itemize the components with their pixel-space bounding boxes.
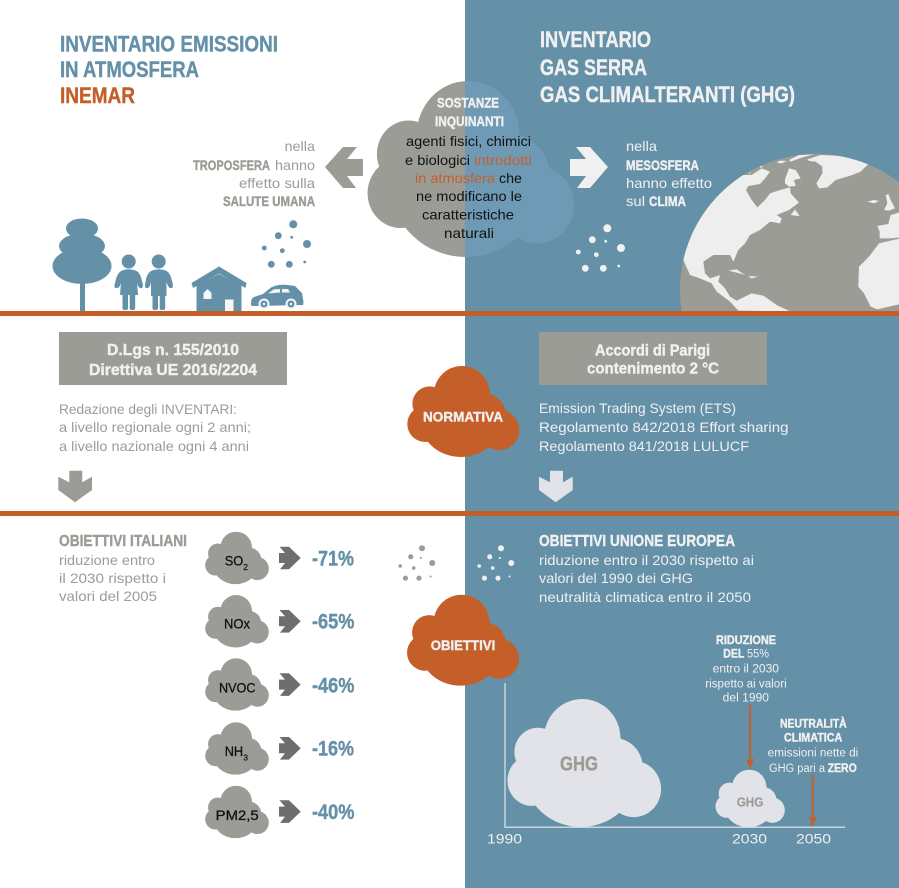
box: D.Lgs: D.Lgs n. 155/2010 bbox=[107, 342, 239, 359]
text block: obiettivi unione europea: riduzione entro il 2030 rispetto ai bbox=[539, 552, 754, 568]
cloud: sostanze inquinanti: INQUINANTI bbox=[435, 113, 504, 129]
title: inventario emissioni bbox=[60, 32, 278, 108]
cloud: sostanze inquinanti: SOSTANZE bbox=[437, 94, 499, 110]
cloud: sostanze inquinanti: in atmosfera bbox=[415, 170, 495, 186]
row: SO2: SO bbox=[225, 553, 243, 569]
icon: pollutant dots white bbox=[576, 224, 625, 272]
icon: house bbox=[192, 266, 246, 311]
icon: two people bbox=[114, 254, 173, 310]
callout: riduzione 55% bbox=[705, 635, 787, 705]
year labels: 2050 bbox=[796, 831, 831, 847]
callout: neutralita climatica: ZERO bbox=[828, 763, 857, 775]
icon: dots grey lower bbox=[398, 545, 435, 581]
text block: obiettivi italiani: valori del 2005 bbox=[59, 588, 157, 604]
callout: riduzione 55%: del 1990 bbox=[723, 693, 769, 705]
cloud: sostanze inquinanti bbox=[368, 81, 574, 257]
text block: troposfera: TROPOSFERA bbox=[193, 157, 270, 173]
title: inventario emissioni: INVENTARIO EMISSIONI bbox=[60, 32, 278, 56]
text block: obiettivi italiani: riduzione entro bbox=[59, 552, 155, 568]
text block: mesosfera: CLIMA bbox=[649, 193, 686, 209]
row: SO2: 2 bbox=[243, 562, 248, 572]
cloud: GHG 2030 bbox=[715, 770, 785, 827]
cloud: obiettivi: OBIETTIVI bbox=[431, 637, 495, 653]
title: inventario gas serra: GAS SERRA bbox=[540, 55, 647, 80]
title: inventario gas serra: INVENTARIO bbox=[540, 27, 651, 52]
text block: regolamenti bbox=[539, 400, 788, 454]
text block: mesosfera: hanno effetto bbox=[626, 175, 712, 191]
year labels: 2030 bbox=[732, 831, 767, 847]
row: NVOC bbox=[205, 658, 355, 711]
row: NOx: NOx bbox=[224, 616, 250, 632]
box: Accordi di Parigi bbox=[539, 332, 767, 385]
text block: obiettivi italiani: OBIETTIVI ITALIANI bbox=[59, 533, 187, 550]
arrow: left to troposfera bbox=[325, 147, 363, 188]
row: NVOC: NVOC bbox=[219, 680, 256, 696]
text block: mesosfera: MESOSFERA bbox=[626, 157, 699, 173]
cloud: sostanze inquinanti: introdotti bbox=[474, 152, 532, 168]
box: Accordi di Parigi: contenimento 2 °C bbox=[587, 360, 719, 378]
row: NH3: -16% bbox=[312, 738, 354, 761]
callout: riduzione 55%: DEL bbox=[723, 649, 744, 661]
row: PM2,5 bbox=[205, 786, 355, 838]
text block: mesosfera: nella bbox=[626, 138, 657, 154]
text block: mesosfera: sul bbox=[626, 193, 645, 209]
row: PM2,5: PM2,5 bbox=[216, 807, 259, 823]
callout: neutralita climatica bbox=[768, 718, 858, 775]
arrow: down right bbox=[539, 471, 573, 502]
row: NOx: -65% bbox=[312, 610, 355, 633]
row: NOx bbox=[205, 595, 355, 648]
text block: obiettivi italiani: il 2030 rispetto i bbox=[59, 570, 166, 586]
row: NVOC: -46% bbox=[312, 674, 355, 697]
year labels bbox=[487, 831, 831, 847]
text block: obiettivi unione europea: neutralità climatica entro il 2050 bbox=[539, 589, 751, 605]
title: inventario emissioni: IN ATMOSFERA bbox=[60, 57, 199, 82]
cloud: GHG 1990 bbox=[507, 699, 661, 827]
cloud: sostanze inquinanti: che bbox=[499, 170, 522, 186]
icon: earth globe bbox=[680, 154, 899, 311]
callout: riduzione 55%: entro il 2030 bbox=[713, 664, 779, 676]
row: NH3 bbox=[205, 722, 354, 775]
text block: troposfera bbox=[193, 138, 315, 209]
text block: troposfera: nella bbox=[284, 138, 315, 154]
icon: tree bbox=[52, 218, 112, 311]
text block: obiettivi unione europea: valori del 1990 dei GHG bbox=[539, 570, 693, 586]
cloud: GHG 1990: GHG bbox=[560, 754, 598, 776]
cloud: normativa: NORMATIVA bbox=[423, 408, 503, 424]
arrow: to 2030 bbox=[746, 705, 754, 770]
callout: neutralita climatica: GHG pari a bbox=[769, 763, 826, 775]
text block: mesosfera bbox=[626, 138, 712, 209]
cloud: GHG 2030: GHG bbox=[737, 795, 763, 810]
callout: riduzione 55%: RIDUZIONE bbox=[716, 635, 776, 647]
text block: obiettivi unione europea: OBIETTIVI UNIONE EUROPEA bbox=[539, 533, 735, 550]
row: NH3: NH bbox=[225, 743, 243, 759]
title: inventario gas serra bbox=[540, 27, 795, 107]
title: inventario emissioni: INEMAR bbox=[60, 83, 135, 108]
text block: redazione inventari bbox=[59, 401, 251, 454]
box: D.Lgs bbox=[59, 332, 287, 385]
text block: regolamenti: Regolamento 842/2018 Effort sharing bbox=[539, 419, 788, 435]
callout: neutralita climatica: emissioni nette di bbox=[768, 748, 858, 760]
text block: troposfera: hanno bbox=[275, 157, 315, 173]
row: SO2: -71% bbox=[312, 548, 354, 571]
row: PM2,5: -40% bbox=[312, 801, 355, 824]
row: SO2 bbox=[205, 532, 354, 584]
row: NH3: 3 bbox=[243, 752, 248, 762]
cloud: sostanze inquinanti: ne modificano le bbox=[416, 188, 522, 204]
arrow: to 2050 bbox=[809, 775, 817, 827]
box: Accordi di Parigi: Accordi di Parigi bbox=[595, 342, 710, 360]
callout: riduzione 55%: 55% bbox=[747, 649, 769, 661]
chart: GHG reduction bbox=[487, 635, 858, 847]
text block: regolamenti: Regolamento 841/2018 LULUCF bbox=[539, 438, 749, 454]
chart axes bbox=[505, 683, 845, 827]
year labels: 1990 bbox=[487, 831, 522, 847]
text block: obiettivi italiani bbox=[59, 533, 187, 604]
box: D.Lgs: Direttiva UE 2016/2204 bbox=[89, 362, 257, 379]
divider bands bbox=[0, 311, 899, 516]
text block: obiettivi unione europea bbox=[539, 533, 754, 605]
text block: redazione inventari: a livello nazionale ogni 4 anni bbox=[59, 438, 249, 454]
icon: car bbox=[251, 285, 304, 310]
text block: redazione inventari: a livello regionale ogni 2 anni; bbox=[59, 419, 251, 435]
icon: pollutant dots blue bbox=[262, 220, 311, 268]
cloud: sostanze inquinanti: caratteristiche bbox=[422, 206, 514, 222]
text block: troposfera: SALUTE UMANA bbox=[223, 193, 315, 209]
cloud: sostanze inquinanti: agenti fisici, chimici bbox=[406, 133, 531, 149]
icon: dots white lower bbox=[477, 545, 514, 581]
text block: troposfera: effetto sulla bbox=[239, 175, 315, 191]
arrow: right to mesosfera bbox=[570, 147, 608, 188]
cloud: sostanze inquinanti: e biologici bbox=[405, 152, 470, 168]
callout: riduzione 55%: rispetto ai valori bbox=[705, 679, 787, 691]
arrow: down left bbox=[58, 471, 92, 502]
panel: right blue background bbox=[465, 0, 899, 888]
title: inventario gas serra: GAS CLIMALTERANTI (GHG) bbox=[540, 82, 795, 107]
cloud: obiettivi bbox=[407, 595, 519, 686]
cloud: normativa bbox=[407, 366, 519, 457]
text block: redazione inventari: Redazione degli INVENTARI: bbox=[59, 401, 237, 417]
cloud: sostanze inquinanti: naturali bbox=[444, 225, 494, 241]
callout: neutralita climatica: NEUTRALITÀ bbox=[780, 718, 847, 731]
callout: neutralita climatica: CLIMATICA bbox=[784, 733, 842, 745]
text block: regolamenti: Emission Trading System (ETS) bbox=[539, 400, 736, 416]
